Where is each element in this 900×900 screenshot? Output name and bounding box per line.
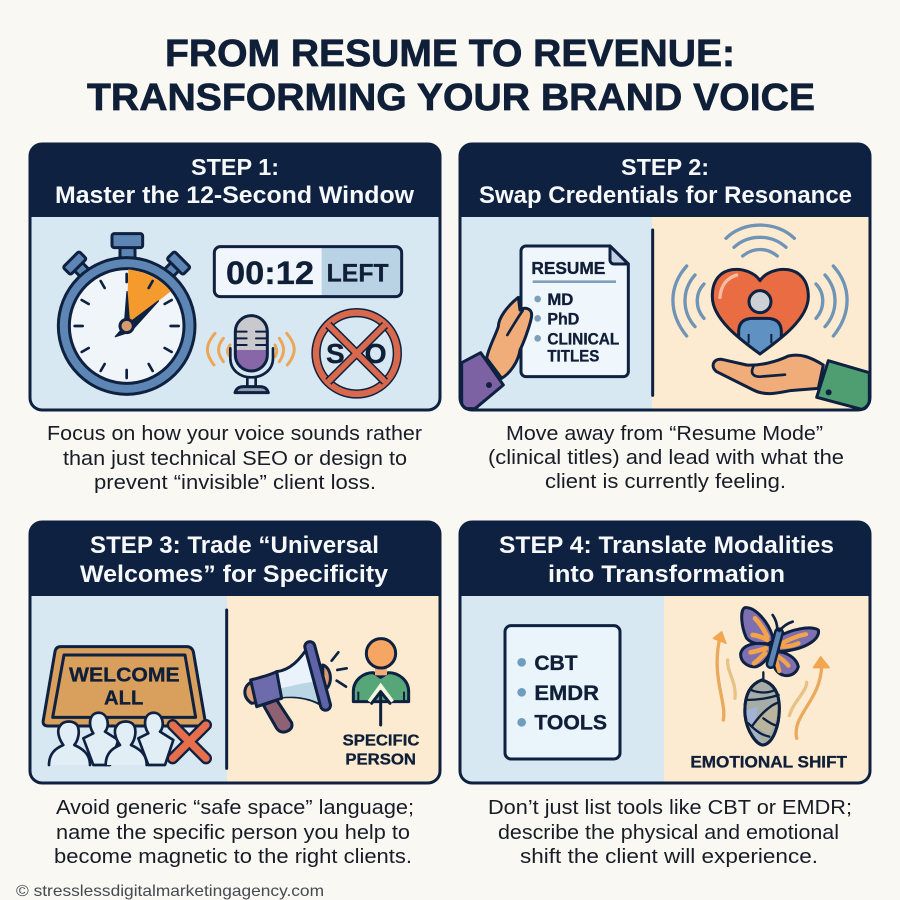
- icon: crossed-out SEO: S: [326, 338, 345, 369]
- step 2 illustration: [462, 225, 869, 409]
- step 2 description: Move away from “Resume Mode”: [506, 423, 823, 445]
- step 1 heading: STEP 1:: [191, 154, 279, 180]
- step 2 heading: Swap Credentials for Resonance: [479, 182, 852, 209]
- step 1 description: Focus on how your voice sounds rather: [47, 423, 422, 445]
- icon: crossed-out SEO: [316, 313, 397, 394]
- icon: red cross: [173, 725, 206, 758]
- welcome mat: WELCOME: [69, 664, 180, 687]
- specific person label: PERSON: [345, 751, 416, 768]
- step 3 description: [54, 797, 414, 868]
- step 3 header band: [29, 521, 441, 596]
- panel: step 3: [29, 521, 441, 783]
- title: TRANSFORMING YOUR BRAND VOICE: [87, 77, 815, 119]
- emotional shift label: EMOTIONAL SHIFT: [690, 752, 847, 771]
- timer readout: [214, 247, 402, 297]
- step 1 heading: Master the 12-Second Window: [55, 182, 414, 209]
- icon: chrysalis: [745, 672, 779, 745]
- step 4 illustration: [505, 608, 847, 771]
- icon: generic crowd: [49, 713, 173, 765]
- icon: crossed-out SEO: O: [365, 338, 387, 369]
- step 3 illustration: [43, 610, 420, 768]
- step 2 description: (clinical titles) and lead with what the: [488, 447, 844, 469]
- step 1 description: prevent “invisible” client loss.: [94, 472, 376, 494]
- step 2 heading: [479, 154, 852, 209]
- icon: microphone: [207, 316, 294, 393]
- welcome mat: [43, 647, 205, 726]
- arrows: upward shift: [713, 632, 829, 738]
- step 3 heading: Welcomes” for Specificity: [80, 561, 389, 588]
- step 1 heading: [55, 154, 414, 209]
- step 3 heading: STEP 3: Trade “Universal: [90, 532, 379, 559]
- step 1 illustration: [58, 234, 402, 394]
- step 4 description: Don’t just list tools like CBT or EMDR;: [488, 797, 852, 819]
- step 4 heading: STEP 4: Translate Modalities: [499, 532, 834, 559]
- modalities card: [505, 626, 620, 759]
- panel: step 2: [459, 143, 871, 410]
- resume document: RESUME: [531, 258, 605, 278]
- resume document: TITLES: [547, 347, 599, 366]
- icon: heart with person: [712, 269, 808, 357]
- step 1 description: than just technical SEO or design to: [63, 448, 407, 470]
- step 4 heading: into Transformation: [548, 561, 785, 588]
- icon: butterfly: [741, 608, 819, 676]
- step 3 description: become magnetic to the right clients.: [54, 846, 412, 868]
- specific person label: [343, 733, 420, 768]
- title: FROM RESUME TO REVENUE:: [165, 33, 735, 75]
- panel: step 1: [29, 143, 441, 410]
- step 2 header band: [459, 143, 871, 217]
- step 4 description: describe the physical and emotional: [498, 822, 839, 844]
- icon: hand holding resume: [462, 297, 532, 409]
- step 1 description: [47, 423, 422, 494]
- step 4 header band: [459, 521, 871, 596]
- step 3 heading: [80, 532, 389, 588]
- divider: [222, 610, 231, 768]
- icon: specific person: [353, 639, 409, 702]
- modalities card: CBT: [534, 651, 578, 675]
- timer readout: LEFT: [327, 260, 389, 287]
- footer credit: © stresslessdigitalmarketingagency.com: [16, 883, 324, 900]
- panel: step 4: [459, 521, 871, 783]
- arrow: up to person: [372, 692, 390, 725]
- specific person label: SPECIFIC: [343, 733, 420, 750]
- step 3 description: Avoid generic “safe space” language;: [56, 797, 414, 819]
- timer readout: 00:12: [226, 255, 314, 291]
- welcome mat: ALL: [104, 686, 143, 709]
- shout lines: [332, 652, 347, 687]
- resume document: CLINICAL: [547, 329, 619, 348]
- title: [87, 33, 815, 119]
- step 4 heading: [499, 532, 834, 588]
- step 1 header band: [29, 143, 441, 217]
- resume document: PhD: [547, 309, 579, 328]
- step 4 description: [488, 797, 852, 868]
- step 2 description: client is currently feeling.: [545, 471, 786, 493]
- resume document: [521, 246, 628, 377]
- step 2 heading: STEP 2:: [621, 154, 709, 180]
- step 3 description: name the specific person you help to: [56, 822, 410, 844]
- sound waves: [673, 225, 847, 336]
- icon: open hand: [713, 355, 869, 409]
- step 2 description: [488, 423, 844, 493]
- divider: [648, 230, 657, 395]
- icon: megaphone: [245, 640, 332, 732]
- modalities card: TOOLS: [534, 710, 607, 734]
- resume document: MD: [547, 290, 573, 309]
- icon: stopwatch: [58, 234, 195, 394]
- step 4 description: shift the client will experience.: [520, 846, 818, 868]
- modalities card: EMDR: [534, 681, 599, 705]
